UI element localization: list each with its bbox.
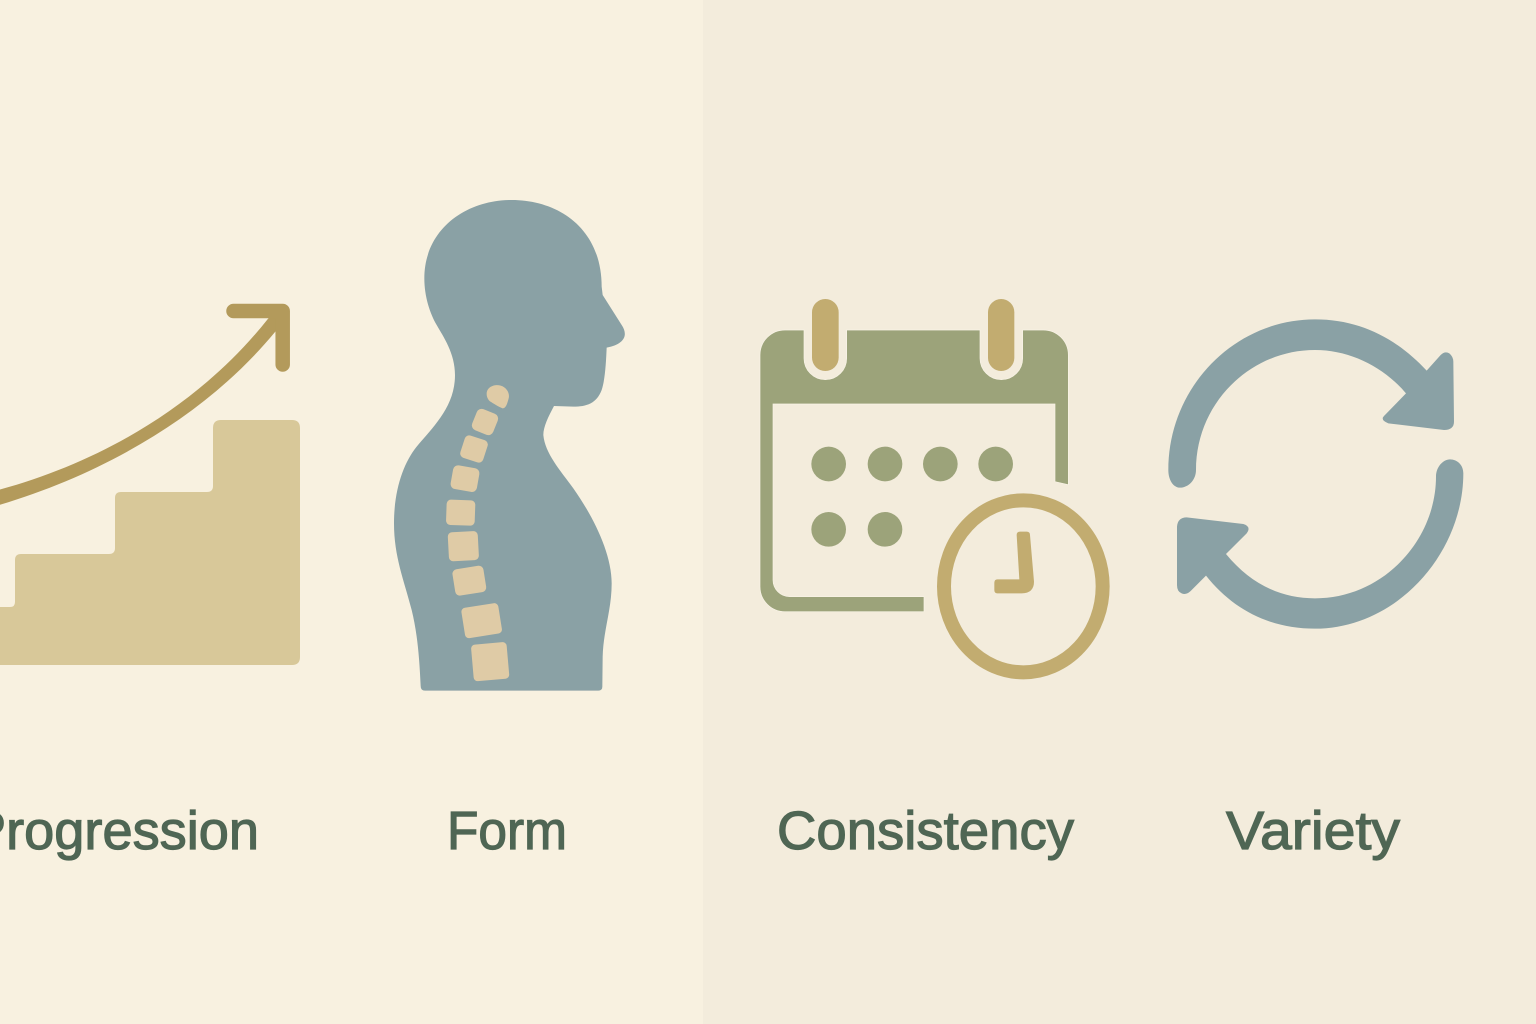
lower arrow <box>1177 459 1463 629</box>
rising curve <box>0 311 283 507</box>
panel: right background <box>703 0 1536 1024</box>
label: Variety: Variety <box>1226 801 1400 861</box>
arrow head <box>234 311 283 364</box>
icon: progression stairs and arrow <box>0 311 300 665</box>
icon: human profile with spine <box>394 200 625 691</box>
calendar dots <box>811 447 1013 547</box>
panel: left background <box>0 0 703 1024</box>
label: Form: Form <box>447 801 567 861</box>
clock hands <box>994 532 1034 593</box>
calendar body <box>760 330 1068 612</box>
calendar rings <box>812 299 1014 371</box>
silhouette <box>394 200 625 691</box>
clock face <box>944 500 1103 672</box>
icon: circular arrows <box>1168 319 1463 629</box>
label: Consistency: Consistency <box>777 801 1074 861</box>
icon: calendar with clock <box>760 299 1103 672</box>
stairs <box>0 420 300 665</box>
spine vertebrae <box>446 385 510 681</box>
upper arrow <box>1168 319 1454 488</box>
